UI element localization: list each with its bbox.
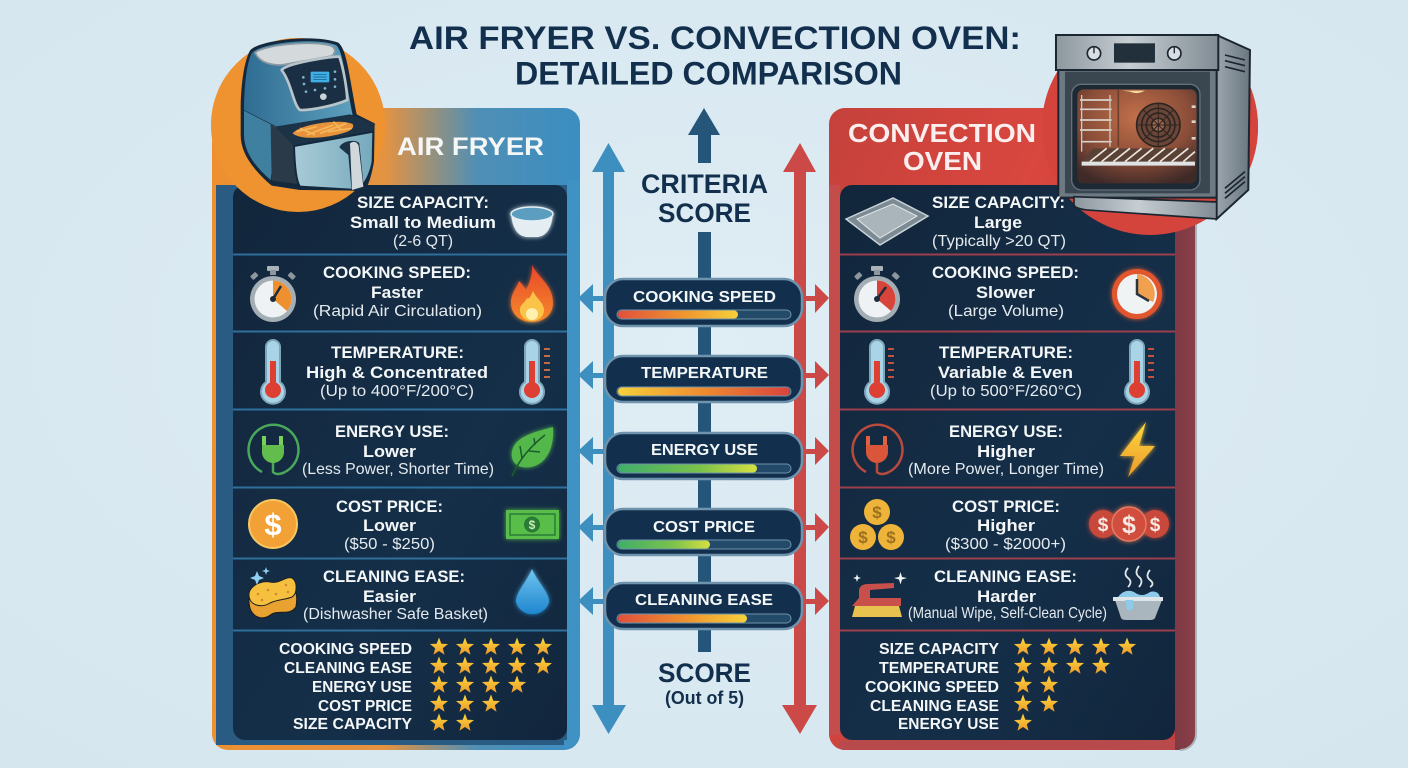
row: energy use: (More Power, Longer Time) — [908, 461, 1104, 478]
icon: stopwatch red — [854, 266, 900, 322]
icon: gold coins: $ — [886, 528, 896, 547]
row: cost price: Lower — [363, 517, 417, 535]
icon: thermometer with ticks — [1125, 340, 1154, 404]
icon: red coins: $ — [1150, 515, 1161, 536]
right connector arrows — [803, 284, 829, 615]
score list: air fryer — [279, 638, 552, 733]
row: cleaning ease: (Dishwasher Safe Basket) — [303, 606, 488, 623]
icon: gold coins: $ — [858, 528, 868, 547]
row: cleaning ease — [303, 568, 488, 623]
convection oven heading — [848, 118, 1036, 176]
row: temperature: (Up to 500°F/260°C) — [930, 383, 1082, 400]
score list: air fryer: CLEANING EASE — [284, 660, 412, 677]
row: temperature: TEMPERATURE: — [331, 344, 464, 362]
icon: red coins — [1089, 507, 1169, 541]
blue double arrow — [592, 143, 626, 734]
row: cooking speed: Faster — [371, 284, 424, 302]
row: cost price: COST PRICE: — [336, 498, 443, 516]
center axis arrow — [688, 108, 720, 652]
row: cooking speed: (Large Volume) — [948, 303, 1064, 320]
pill: energy use: ENERGY USE — [651, 442, 758, 459]
score list: convection oven: ENERGY USE — [898, 716, 999, 733]
air fryer heading: AIR FRYER — [397, 133, 544, 161]
row: cost price — [945, 498, 1066, 553]
criteria score label: SCORE — [658, 198, 751, 228]
icon: coin: $ — [264, 507, 282, 542]
pill: cooking speed — [605, 279, 802, 326]
pill: energy use — [605, 433, 802, 479]
score list: convection oven: TEMPERATURE — [879, 660, 999, 677]
row: size capacity: (Typically >20 QT) — [932, 233, 1066, 250]
row: cleaning ease: CLEANING EASE: — [323, 568, 465, 586]
row: cleaning ease — [908, 568, 1107, 622]
score list: air fryer: COST PRICE — [318, 698, 412, 715]
icon: gold coins — [850, 499, 904, 550]
row: temperature: TEMPERATURE: — [939, 344, 1073, 362]
row: energy use: ENERGY USE: — [949, 423, 1063, 441]
panel: air fryer — [211, 38, 580, 750]
icon: green plug — [248, 425, 298, 474]
icon: soapy basin — [1113, 566, 1163, 620]
icon: bowl — [511, 207, 553, 237]
row: size capacity: (2-6 QT) — [393, 233, 453, 250]
icon: air fryer — [241, 38, 375, 191]
title — [409, 20, 1021, 92]
row: cleaning ease: CLEANING EASE: — [934, 568, 1077, 586]
criteria score label — [641, 169, 768, 228]
row: size capacity: Large — [974, 214, 1022, 232]
row: temperature — [306, 344, 488, 400]
icon: thermometer with ticks — [865, 340, 894, 404]
orange circle overlap — [211, 38, 385, 212]
row: size capacity: SIZE CAPACITY: — [932, 194, 1065, 212]
row: energy use — [302, 423, 494, 478]
red circle overlap — [1044, 72, 1258, 235]
orange circle behind fryer — [211, 38, 385, 212]
row: cost price — [336, 498, 443, 553]
row: energy use: Higher — [977, 443, 1036, 461]
icon: water drop — [516, 569, 549, 614]
row: temperature: Variable & Even — [938, 364, 1073, 382]
score list: convection oven: COOKING SPEED — [865, 679, 999, 696]
inner table — [233, 185, 567, 740]
title: DETAILED COMPARISON — [515, 56, 902, 92]
row: cleaning ease: Harder — [977, 588, 1037, 606]
row: cost price: COST PRICE: — [952, 498, 1060, 516]
icon: leaf — [512, 427, 553, 476]
row: cost price: ($50 - $250) — [344, 536, 435, 553]
panel background — [212, 108, 580, 750]
icon: red plug — [852, 425, 902, 474]
score list: convection oven — [865, 638, 1136, 733]
score list: convection oven: CLEANING EASE — [870, 698, 999, 715]
icon: lightning bolt — [1120, 422, 1155, 477]
pill: cleaning ease — [605, 583, 802, 629]
icon: stopwatch orange — [250, 266, 296, 322]
icon: clock — [1112, 269, 1162, 319]
score list: air fryer: COOKING SPEED — [279, 641, 412, 658]
row: cooking speed: COOKING SPEED: — [323, 264, 471, 282]
icon: red coins: $ — [1122, 511, 1136, 539]
pill: cleaning ease: CLEANING EASE — [635, 592, 773, 609]
row: cooking speed — [313, 264, 482, 320]
row: size capacity — [932, 194, 1066, 250]
icon: red coins: $ — [1098, 515, 1109, 536]
row: temperature: (Up to 400°F/200°C) — [320, 383, 474, 400]
red circle behind oven — [1044, 72, 1258, 224]
row: cleaning ease: (Manual Wipe, Self-Clean Cycle) — [908, 605, 1107, 622]
convection oven heading: CONVECTION — [848, 118, 1036, 148]
icon: sponge — [249, 567, 297, 618]
icon: baking tray — [846, 198, 928, 245]
icon: flame — [511, 265, 553, 322]
icon: gold coins: $ — [872, 503, 882, 522]
pill: temperature: TEMPERATURE — [641, 365, 768, 382]
icon: coin — [249, 500, 297, 548]
row: cooking speed: (Rapid Air Circulation) — [313, 303, 482, 320]
row: energy use: (Less Power, Shorter Time) — [302, 461, 494, 478]
score label — [658, 658, 751, 708]
row: energy use: Lower — [363, 443, 417, 461]
pill: temperature — [605, 356, 802, 402]
panel: convection oven — [829, 19, 1258, 750]
row: cost price: Higher — [977, 517, 1036, 535]
row: size capacity: Small to Medium — [350, 214, 496, 232]
icon: banknote — [506, 510, 559, 539]
row: energy use — [908, 423, 1104, 478]
convection oven heading: OVEN — [903, 146, 982, 176]
left connector arrows — [578, 284, 604, 615]
row: energy use: ENERGY USE: — [335, 423, 449, 441]
row: temperature: High & Concentrated — [306, 364, 488, 382]
inner table — [840, 185, 1175, 740]
red double arrow — [782, 143, 817, 734]
panel background — [829, 108, 1196, 750]
pill: cost price: COST PRICE — [653, 519, 755, 536]
row: size capacity: SIZE CAPACITY: — [357, 194, 489, 212]
row: cooking speed: COOKING SPEED: — [932, 264, 1079, 282]
criteria score label: CRITERIA — [641, 169, 768, 199]
icon: banknote: $ — [529, 518, 536, 532]
icon: oven — [1056, 35, 1250, 219]
score list: air fryer: SIZE CAPACITY — [293, 716, 412, 733]
row: size capacity — [350, 194, 496, 250]
icon: thermometer — [261, 340, 285, 404]
score label: SCORE — [658, 658, 751, 688]
icon: scrub brush — [852, 572, 907, 617]
row: cooking speed: Slower — [976, 284, 1036, 302]
row: cost price: ($300 - $2000+) — [945, 536, 1066, 553]
row: cleaning ease: Easier — [363, 588, 417, 606]
pill: cost price — [605, 509, 802, 555]
row: temperature — [930, 344, 1082, 400]
row: cooking speed — [932, 264, 1079, 320]
score list: convection oven: SIZE CAPACITY — [879, 641, 999, 658]
score label: (Out of 5) — [665, 688, 744, 708]
pill: cooking speed: COOKING SPEED — [633, 289, 776, 306]
score list: air fryer: ENERGY USE — [312, 679, 412, 696]
title: AIR FRYER VS. CONVECTION OVEN: — [409, 20, 1021, 56]
icon: thermometer with ticks — [520, 340, 550, 404]
